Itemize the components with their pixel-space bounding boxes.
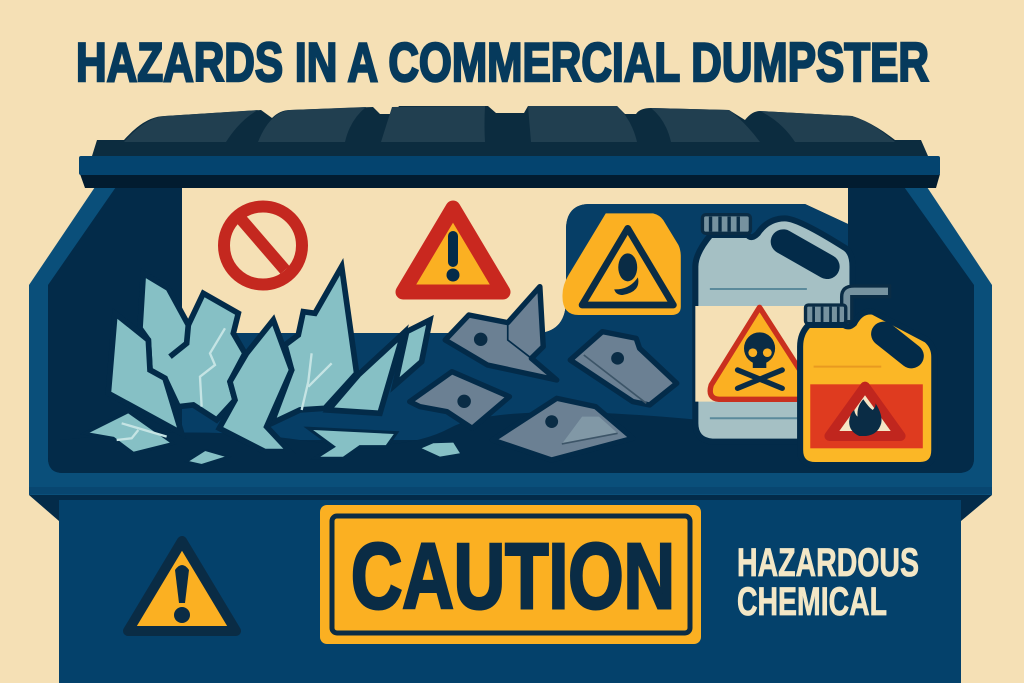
icon: flame warning triangle [830, 387, 900, 436]
icon: yellow warning sign with figure [562, 213, 681, 315]
shard: lower left metal [410, 372, 509, 428]
shard: right metal [570, 332, 677, 405]
panel: interior warning signs [224, 206, 503, 292]
lid segments [124, 106, 895, 142]
jug: grey skull [695, 215, 852, 442]
icon: skull warning triangle [710, 307, 819, 399]
glass: left shard [108, 313, 182, 433]
glass: floor shards [85, 412, 460, 465]
chemical jugs [695, 215, 934, 465]
jug: yellow flammable [800, 286, 934, 465]
glass: thin right shard [395, 320, 430, 385]
glass: center shard [219, 320, 292, 452]
icon: warning triangle [403, 208, 503, 292]
glass: right shard [272, 267, 357, 423]
icon: prohibition sign [224, 206, 302, 284]
caution sign [320, 505, 701, 644]
shard: bottom metal [493, 398, 633, 460]
hazardous chemical label [737, 541, 919, 624]
broken glass shards [85, 267, 460, 465]
hazardous chemical label: HAZARDOUS [737, 541, 919, 585]
dumpster body [29, 184, 992, 683]
metal shards [410, 287, 677, 460]
glass: cracks [117, 328, 332, 440]
lid [79, 106, 940, 188]
glass: back shard [140, 273, 245, 420]
caution sign: CAUTION [351, 524, 675, 628]
shard: upper metal [445, 287, 557, 380]
warning triangle on body [128, 541, 236, 631]
hazardous chemical label: CHEMICAL [737, 580, 887, 624]
